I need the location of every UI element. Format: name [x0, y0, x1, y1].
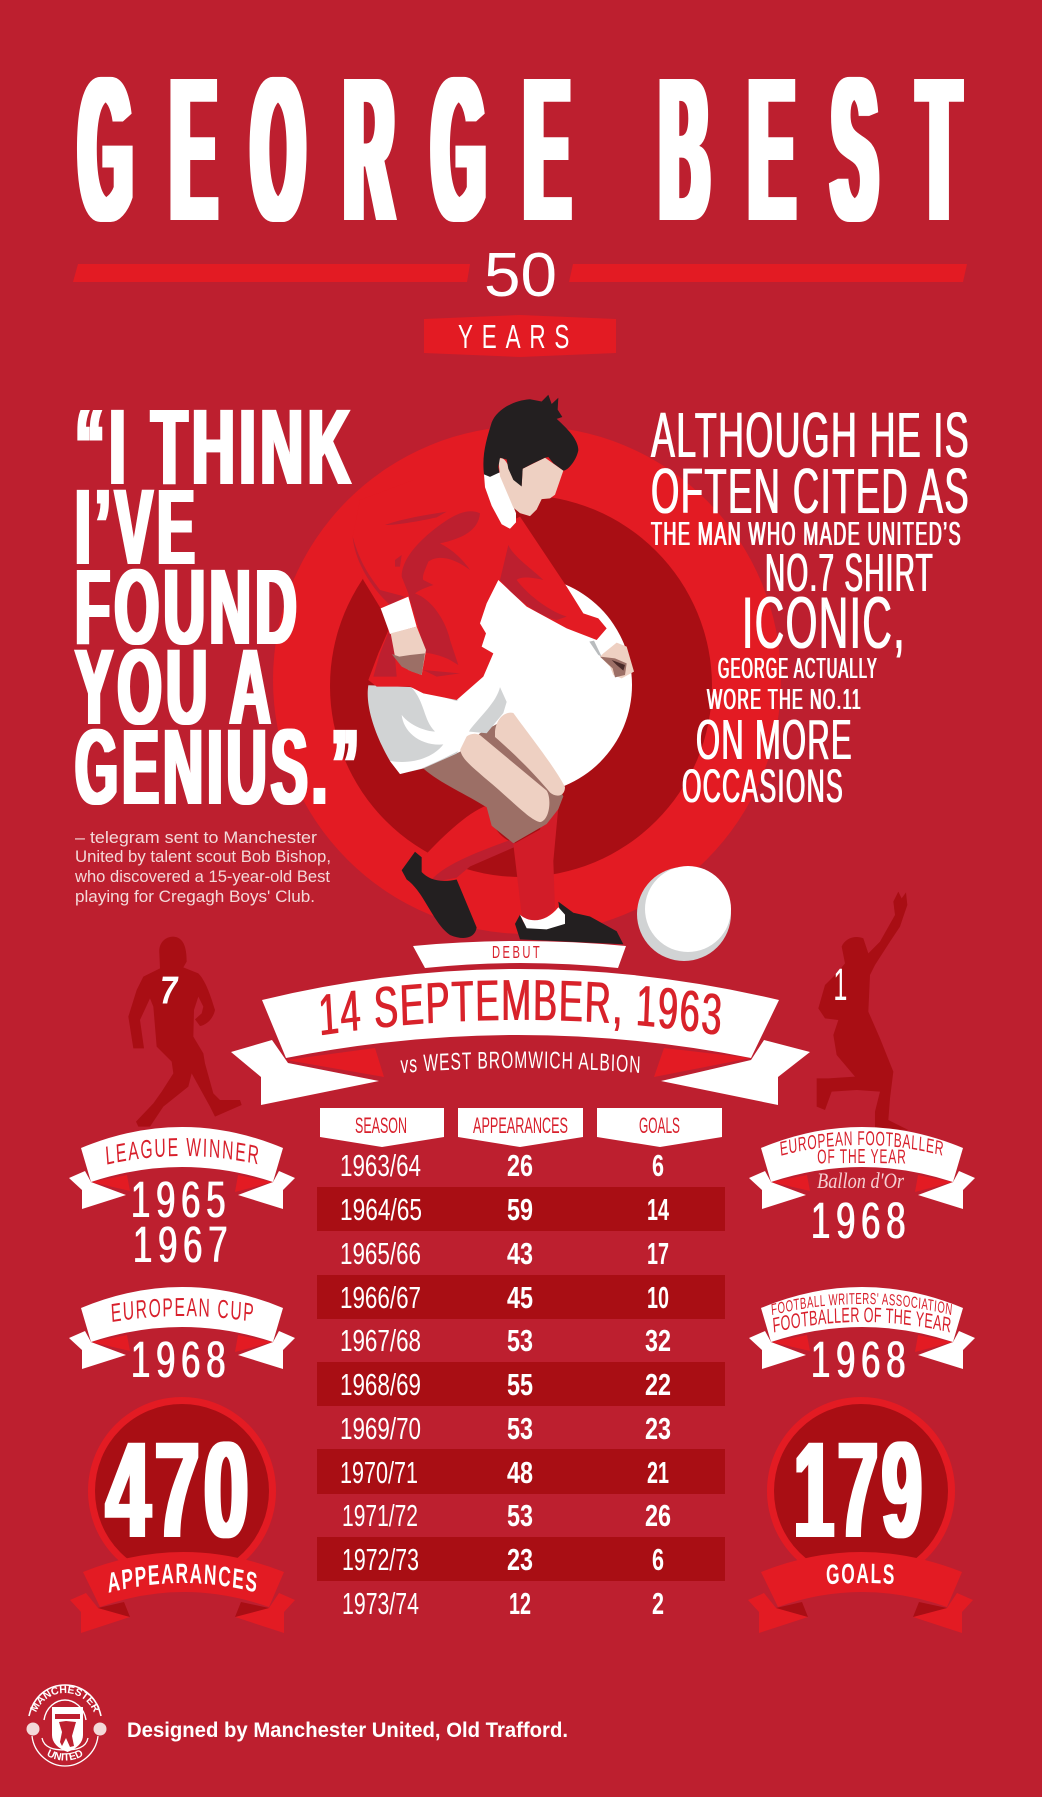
- skin thigh 2: [495, 713, 565, 796]
- table rows: 59: [507, 1193, 533, 1227]
- debut date banner: [231, 969, 810, 1105]
- debut label: DEBUT: [492, 942, 542, 963]
- manchester united crest: UNITED: [48, 1749, 82, 1760]
- stat: 470 appearances: APPEARANCES: [108, 1564, 257, 1593]
- silhouette: number 11 player: [817, 892, 908, 1130]
- honour: football writers' association: [749, 1287, 975, 1389]
- table rows: 43: [507, 1237, 533, 1271]
- years badge: YEARS: [458, 318, 578, 355]
- years badge: [424, 315, 616, 357]
- table rows: 53: [507, 1324, 533, 1358]
- right boot: [515, 902, 623, 944]
- table rows: 1973/74: [342, 1587, 419, 1621]
- manchester united crest: MANCHESTER: [30, 1686, 100, 1712]
- stat: 179 goals: GOALS: [826, 1564, 894, 1584]
- footer credit: Designed by Manchester United, Old Trafford.: [127, 1719, 568, 1742]
- table rows: 14: [647, 1193, 669, 1227]
- right cuff: [589, 641, 602, 657]
- quote: YOU A: [75, 626, 275, 747]
- table header: GOALS: [639, 1113, 680, 1138]
- table rows: 23: [645, 1412, 671, 1446]
- dark thigh: [423, 722, 563, 843]
- quote: “I THINK: [75, 386, 355, 507]
- honour: european footballer of the year: [749, 1127, 975, 1250]
- player lower body: [368, 678, 623, 944]
- quote attribution: who discovered a 15-year-old Best: [74, 867, 330, 886]
- stat: 470 appearances: 470: [106, 1414, 253, 1567]
- right column statement: OCCASIONS: [682, 759, 844, 812]
- collar: [484, 472, 516, 529]
- table rows: 48: [507, 1456, 533, 1490]
- title: GEORGE BEST: [79, 36, 960, 264]
- table header: [320, 1108, 722, 1147]
- table rows: 26: [645, 1499, 671, 1533]
- right hand: [600, 643, 634, 678]
- quote attribution: [74, 828, 331, 906]
- table rows: 1971/72: [342, 1499, 418, 1533]
- manchester united crest: [26, 1684, 106, 1767]
- silhouette: number 7 player: [128, 937, 242, 1127]
- honour: european cup: EUROPEAN CUP: [112, 1298, 253, 1322]
- table rows: 1966/67: [340, 1281, 421, 1315]
- silhouette: number 7 player: 7: [160, 969, 179, 1012]
- honour: league winner: LEAGUE WINNER: [106, 1138, 258, 1164]
- table rows: 55: [507, 1368, 533, 1402]
- skin thigh 1: [460, 734, 549, 822]
- header rule left: [73, 264, 470, 282]
- table rows: 17: [647, 1237, 669, 1271]
- stat: 470 appearances: [70, 1397, 295, 1633]
- honour: european footballer of the year: EUROPEAN FOOTBALLER: [780, 1131, 943, 1156]
- left hand: [391, 627, 426, 675]
- table rows: 1972/73: [342, 1543, 419, 1577]
- table rows: 1964/65: [340, 1193, 422, 1227]
- silhouette: number 11 player: 1: [833, 959, 847, 1010]
- table rows: 1970/71: [340, 1456, 418, 1490]
- honour: league winner: 1965: [131, 1173, 231, 1229]
- player shirt and arms: [353, 480, 634, 700]
- table header: APPEARANCES: [473, 1113, 568, 1138]
- honour: league winner: [69, 1127, 295, 1274]
- honour: league winner: 1967: [133, 1218, 233, 1274]
- header rule right: [569, 264, 967, 282]
- table rows: 23: [507, 1543, 533, 1577]
- quote: FOUND: [75, 546, 301, 667]
- table rows: 21: [647, 1456, 669, 1490]
- table rows: 12: [509, 1587, 531, 1621]
- quote attribution: playing for Cregagh Boys' Club.: [75, 887, 315, 906]
- table rows: 53: [507, 1412, 533, 1446]
- table rows: 45: [507, 1281, 533, 1315]
- quote attribution: United by talent scout Bob Bishop,: [75, 847, 331, 866]
- shirt: [353, 480, 607, 700]
- match ball: [637, 866, 731, 961]
- honour: european footballer of the year: Ballon d'Or: [817, 1168, 904, 1193]
- left boot: [402, 852, 477, 938]
- honour: european footballer of the year: 1968: [811, 1194, 911, 1250]
- honour: football writers' association: 1968: [811, 1333, 911, 1389]
- hair: [483, 395, 578, 487]
- quote: I’VE: [75, 466, 199, 587]
- table header: SEASON: [355, 1113, 407, 1138]
- quote attribution: – telegram sent to Manchester: [75, 828, 317, 847]
- debut date banner: vs WEST BROMWICH ALBION: [400, 1051, 640, 1073]
- quote: [75, 386, 363, 827]
- front sock: [513, 798, 558, 928]
- honour: european footballer of the year: OF THE YEAR: [818, 1149, 906, 1164]
- table rows: 6: [652, 1543, 664, 1577]
- table rows: 1963/64: [340, 1149, 421, 1183]
- table rows: 10: [647, 1281, 669, 1315]
- shirt fold shadows: [353, 511, 567, 677]
- right column statement: ICONIC,: [742, 583, 906, 664]
- stat: 179 goals: 179: [794, 1414, 926, 1567]
- table rows: 26: [507, 1149, 533, 1183]
- shorts highlight: [390, 678, 500, 774]
- table rows: 22: [645, 1368, 671, 1402]
- quote: GENIUS.”: [75, 706, 363, 827]
- honour: football writers' association: FOOTBALLER OF THE YEAR: [773, 1308, 950, 1332]
- right column statement: GEORGE ACTUALLY: [718, 653, 878, 685]
- table rows: 32: [645, 1324, 671, 1358]
- player head: [483, 395, 578, 529]
- honour: football writers' association: FOOTBALL WRITERS' ASSOCIATION: [771, 1292, 952, 1315]
- face: [498, 458, 563, 516]
- left cuff: [381, 597, 417, 634]
- number 50: 50: [484, 241, 557, 310]
- table rows: 6: [652, 1149, 664, 1183]
- table rows: 1967/68: [340, 1324, 421, 1358]
- right column statement: [651, 399, 970, 812]
- debut label: [413, 941, 626, 968]
- stat: 179 goals: [748, 1397, 973, 1633]
- honour: european cup: 1968: [131, 1333, 231, 1389]
- target circles: [273, 426, 781, 934]
- shorts shadow: [368, 685, 507, 774]
- table rows: 1965/66: [340, 1237, 421, 1271]
- table rows: 1968/69: [340, 1368, 421, 1402]
- right column statement: WORE THE NO.11: [707, 684, 862, 716]
- table rows: [317, 1149, 725, 1621]
- debut date banner: 14 SEPTEMBER, 1963: [320, 980, 720, 1036]
- table rows: 2: [652, 1587, 664, 1621]
- table rows: 53: [507, 1499, 533, 1533]
- honour: european cup: [69, 1287, 295, 1389]
- back leg and rear sock: [420, 805, 513, 883]
- table rows: 1969/70: [340, 1412, 421, 1446]
- right column statement: ON MORE: [696, 708, 853, 772]
